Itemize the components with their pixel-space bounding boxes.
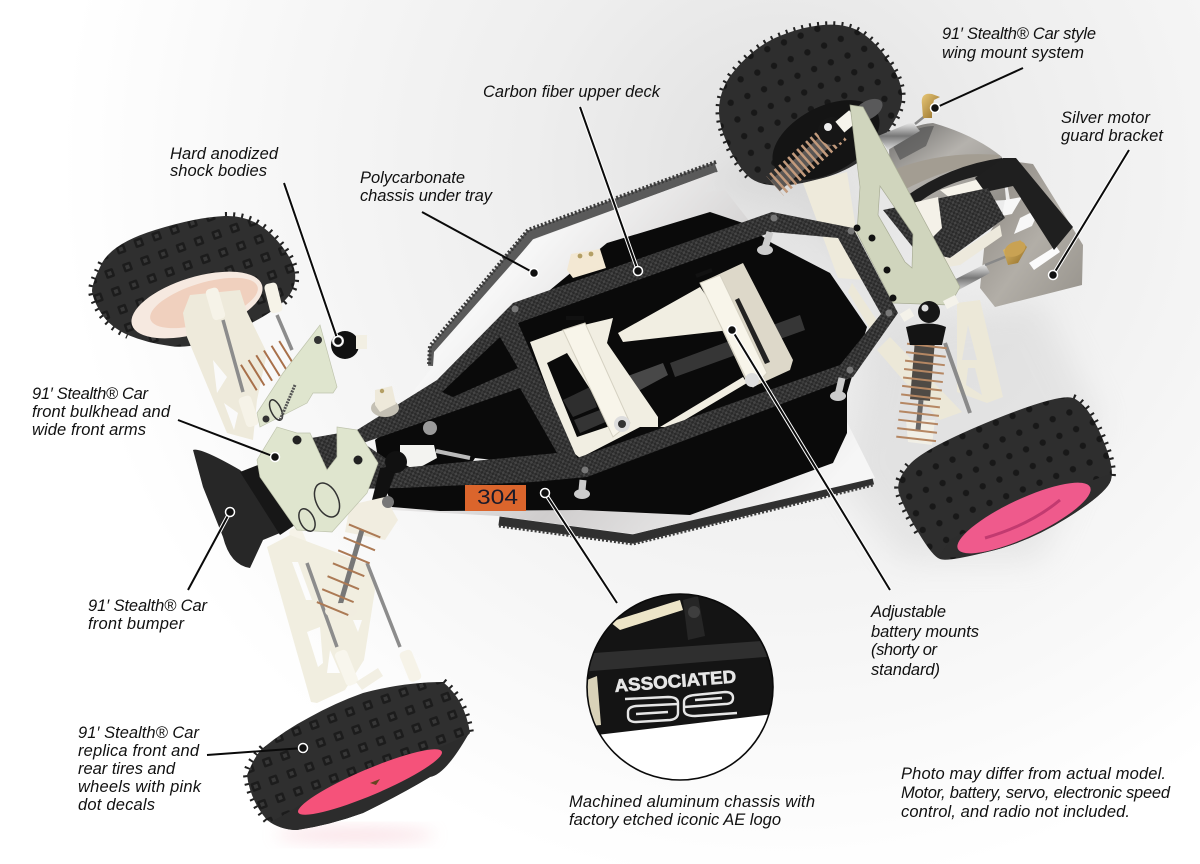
leader: tires bbox=[207, 744, 308, 755]
rear top tire bbox=[719, 25, 902, 196]
leader lines bbox=[178, 68, 1129, 755]
label: replica tires and wheels: replica front and bbox=[78, 742, 200, 760]
plate screws bbox=[854, 224, 896, 302]
number plate 304: 304 bbox=[477, 486, 518, 509]
label: machined aluminum chassis bbox=[569, 793, 815, 829]
white body post bbox=[567, 249, 606, 278]
polycarbonate chassis under tray bbox=[363, 172, 875, 534]
rear pink wheel bbox=[898, 397, 1112, 566]
label: polycarbonate chassis under tray: Polycarbonate bbox=[360, 169, 465, 187]
panel: car photo bbox=[92, 25, 1112, 830]
label: silver motor guard bracket: Silver motor bbox=[1061, 109, 1152, 127]
inset: machined aluminum chassis close-up bbox=[586, 593, 774, 781]
foam battery strips bbox=[563, 315, 805, 433]
rear arms bbox=[803, 172, 1003, 420]
front bulkhead lower plate bbox=[257, 427, 378, 532]
leader: wing mount bbox=[930, 68, 1023, 112]
left front wheel bbox=[92, 216, 295, 352]
label: front bulkhead and wide front arms: wide front arms bbox=[32, 421, 146, 439]
disclaimer note: Photo may differ from actual model. bbox=[901, 765, 1166, 783]
front body post bbox=[371, 386, 399, 417]
disclaimer note: Motor, battery, servo, electronic speed bbox=[901, 784, 1171, 802]
front lower shock bbox=[325, 451, 407, 619]
left battery mount bbox=[530, 318, 658, 458]
black bumper bracket bbox=[240, 465, 295, 535]
right battery mount bbox=[618, 263, 793, 427]
label: hard anodized shock bodies bbox=[170, 145, 279, 180]
leader: AE logo bbox=[540, 488, 617, 603]
label: silver motor guard bracket bbox=[1061, 109, 1164, 145]
leader: under tray bbox=[422, 212, 538, 278]
cream side strip bbox=[848, 283, 878, 332]
label: polycarbonate chassis under tray bbox=[360, 169, 494, 205]
polycarbonate under tray fringe bbox=[429, 162, 873, 544]
disclaimer note: control, and radio not included. bbox=[901, 803, 1130, 821]
battery mounts bbox=[530, 263, 793, 458]
soft shadows under the car bbox=[275, 130, 1100, 841]
label: machined aluminum chassis: Machined aluminum chassis with bbox=[569, 793, 815, 811]
carbon fiber upper deck bbox=[300, 212, 898, 490]
front steering links bbox=[223, 315, 292, 392]
chrome posts and deck screws bbox=[512, 214, 892, 499]
label: carbon fiber upper deck: Carbon fiber upper deck bbox=[483, 83, 661, 101]
rear carbon motor plate bbox=[883, 188, 1005, 270]
label: replica tires and wheels: 91′ Stealth® Car bbox=[78, 724, 200, 742]
white rod ends bbox=[205, 282, 313, 562]
steering link under deck bbox=[400, 421, 512, 470]
disclaimer note bbox=[901, 765, 1171, 821]
label: machined aluminum chassis: factory etched iconic AE logo bbox=[569, 811, 781, 829]
hard anodized shock body bbox=[331, 331, 367, 359]
label: wing mount system: wing mount system bbox=[942, 44, 1084, 62]
label: polycarbonate chassis under tray: chassis under tray bbox=[360, 187, 494, 205]
replica front wheel with pink dot bbox=[247, 682, 470, 830]
label: wing mount system: 91′ Stealth® Car style bbox=[942, 25, 1096, 43]
label: hard anodized shock bodies: Hard anodized bbox=[170, 145, 279, 163]
leader: front bulkhead bbox=[178, 420, 280, 462]
label: adjustable battery mounts: battery mounts bbox=[871, 623, 979, 641]
label: replica tires and wheels: dot decals bbox=[78, 796, 155, 814]
inset: machined aluminum chassis close-up: ASSOCIATED bbox=[614, 666, 737, 696]
front upper arm bbox=[183, 290, 267, 440]
rear suspension rod bbox=[945, 343, 970, 413]
rear chrome shock mounts bbox=[878, 116, 1010, 292]
label: front bumper: front bumper bbox=[88, 615, 186, 633]
front lower arm bbox=[267, 535, 375, 703]
icon: AE logo bbox=[625, 692, 737, 722]
rear right shock bbox=[902, 299, 957, 445]
label: front bumper: 91′ Stealth® Car bbox=[88, 597, 208, 615]
leader: upper deck bbox=[580, 107, 642, 276]
leader: battery mounts bbox=[728, 326, 890, 590]
label: wing mount system bbox=[942, 25, 1096, 62]
icon: brass wing mount bbox=[922, 94, 1028, 265]
label: adjustable battery mounts: Adjustable bbox=[870, 603, 946, 621]
front lower links bbox=[307, 563, 422, 690]
label: adjustable battery mounts: (shorty or bbox=[871, 641, 938, 659]
label: hard anodized shock bodies: shock bodies bbox=[170, 162, 267, 180]
rear upper shock bbox=[775, 110, 858, 186]
label: front bumper bbox=[88, 597, 208, 633]
leader: motor guard bbox=[1048, 150, 1129, 280]
black front bumper bbox=[193, 450, 280, 568]
rear motor and gear cover bbox=[888, 123, 1010, 208]
leader: front bumper bbox=[188, 508, 234, 590]
label: replica tires and wheels bbox=[78, 724, 202, 814]
label: adjustable battery mounts bbox=[870, 603, 979, 679]
label: adjustable battery mounts: standard) bbox=[871, 661, 940, 679]
bulkhead decals and screws bbox=[262, 336, 362, 534]
black aluminum chassis bbox=[375, 212, 867, 515]
rear bulkhead plate bbox=[850, 105, 960, 305]
label: silver motor guard bracket: guard bracket bbox=[1061, 127, 1164, 145]
label: replica tires and wheels: wheels with pink bbox=[78, 778, 202, 796]
label: front bulkhead and wide front arms: 91′ Stealth® Car bbox=[32, 385, 150, 403]
front upper spring bbox=[248, 352, 290, 378]
number plate 304 bbox=[465, 485, 526, 511]
label: replica tires and wheels: rear tires and bbox=[78, 760, 176, 778]
silver motor guard bracket bbox=[975, 158, 1083, 307]
label: front bulkhead and wide front arms: front bulkhead and bbox=[32, 403, 171, 421]
label: front bulkhead and wide front arms bbox=[32, 385, 171, 439]
leader: shock bodies bbox=[284, 183, 342, 346]
front bulkhead upper plate bbox=[257, 325, 337, 427]
